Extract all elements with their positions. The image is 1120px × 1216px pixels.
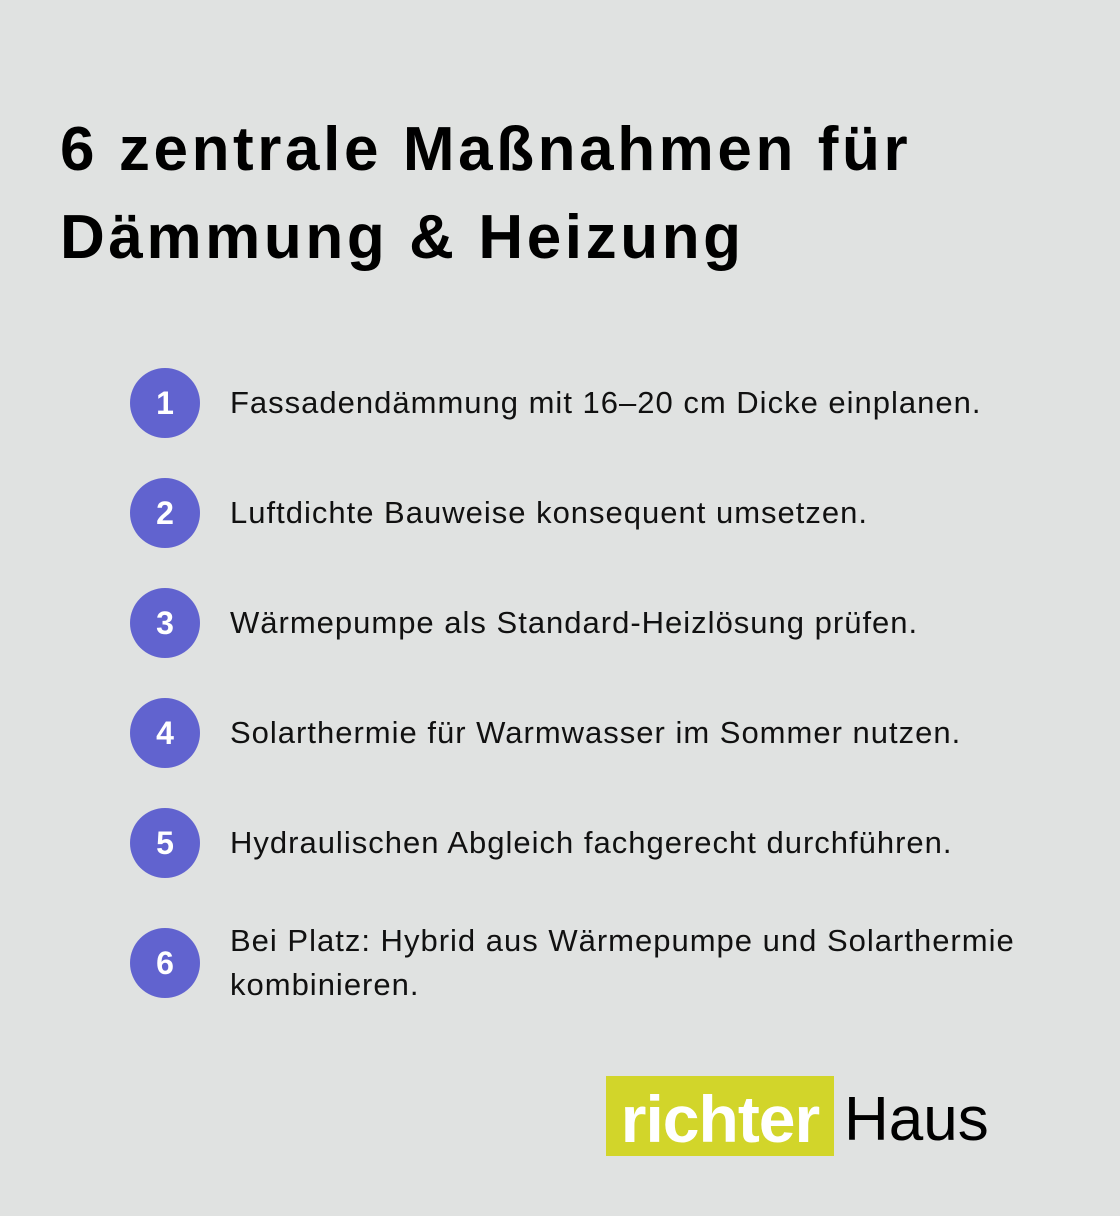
item 3: 3 [156,605,174,641]
item 5 [130,808,953,878]
title: Dämmung & Heizung [60,203,745,272]
item 5: Hydraulischen Abgleich fachgerecht durchführen. [230,825,953,860]
item 5: 5 [156,825,174,861]
item 4: 4 [156,715,174,751]
item 6: kombinieren. [230,967,419,1002]
logo [606,1076,989,1156]
logo: richter [621,1082,819,1156]
item 2: Luftdichte Bauweise konsequent umsetzen. [230,495,868,530]
title [60,115,911,272]
item 6: 6 [156,945,174,981]
title: 6 zentrale Maßnahmen für [60,115,911,184]
item 2 [130,478,868,548]
item 1: Fassadendämmung mit 16–20 cm Dicke einplanen. [230,385,982,420]
item 1: 1 [156,385,174,421]
item 2: 2 [156,495,174,531]
item 1 [130,368,982,438]
item 3: Wärmepumpe als Standard-Heizlösung prüfen. [230,605,918,640]
item 4: Solarthermie für Warmwasser im Sommer nutzen. [230,715,961,750]
item 6 [130,923,1015,1002]
item 6: Bei Platz: Hybrid aus Wärmepumpe und Solarthermie [230,923,1015,958]
item 4 [130,698,961,768]
item 3 [130,588,918,658]
logo: Haus [844,1085,989,1154]
